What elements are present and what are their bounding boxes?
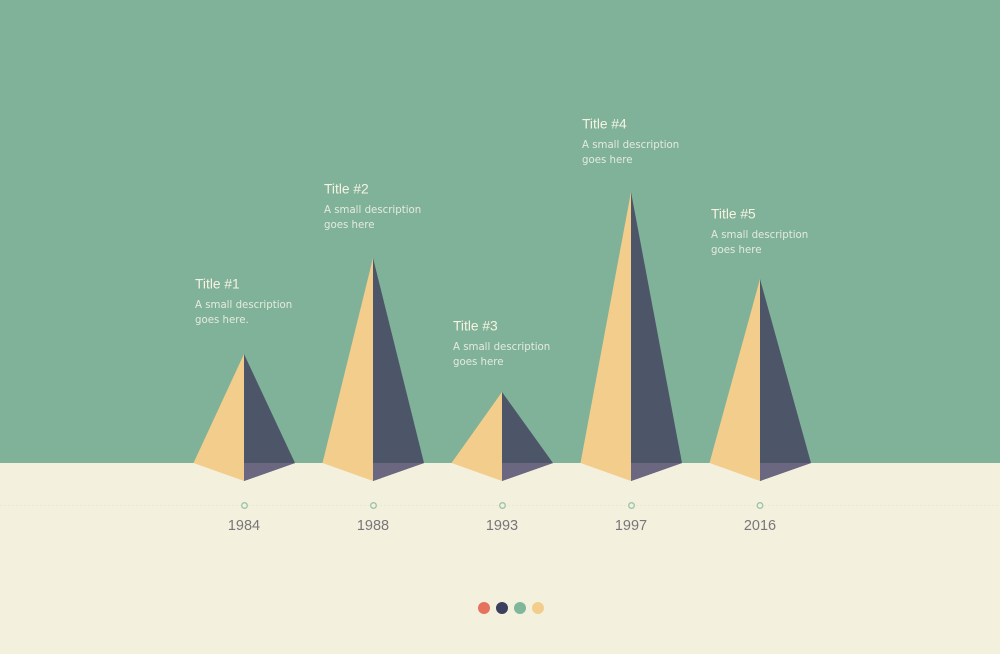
pyramid 1 xyxy=(194,354,295,481)
text block: title 3 xyxy=(453,318,550,368)
timeline marker 2 xyxy=(371,503,376,508)
year label 1984: 1984 xyxy=(228,518,260,534)
pyramid 5 xyxy=(710,279,811,481)
colour palette dots xyxy=(478,602,544,614)
text block: title 2: A small description xyxy=(324,205,421,216)
year label 1993: 1993 xyxy=(486,518,518,534)
text block: title 5: A small description xyxy=(711,230,808,241)
text block: title 3: goes here xyxy=(453,357,503,368)
pyramid 3 xyxy=(452,392,553,481)
text block: title 4: Title #4 xyxy=(582,116,627,132)
text block: title 1: goes here. xyxy=(195,315,249,326)
text block: title 2: goes here xyxy=(324,220,374,231)
text block: title 1: Title #1 xyxy=(195,276,240,292)
year label 2016: 2016 xyxy=(744,518,776,534)
text block: title 3: Title #3 xyxy=(453,318,498,334)
timeline marker 3 xyxy=(500,503,505,508)
pyramid 2 xyxy=(322,258,424,481)
timeline marker 4 xyxy=(629,503,634,508)
text block: title 4 xyxy=(582,116,679,166)
text block: title 4: A small description xyxy=(582,140,679,151)
pyramid 4 xyxy=(580,192,682,481)
panel: green sky background xyxy=(0,0,1000,463)
panel: cream ground xyxy=(0,463,1000,654)
year label 1997: 1997 xyxy=(615,518,647,534)
year label 1988: 1988 xyxy=(357,518,389,534)
text block: title 1: A small description xyxy=(195,300,292,311)
timeline marker 1 xyxy=(242,503,247,508)
text block: title 5 xyxy=(711,206,808,256)
text block: title 5: Title #5 xyxy=(711,206,756,222)
text block: title 3: A small description xyxy=(453,342,550,353)
text block: title 2 xyxy=(324,182,421,231)
text block: title 2: Title #2 xyxy=(324,182,369,196)
text block: title 1 xyxy=(195,276,292,326)
text block: title 5: goes here xyxy=(711,245,761,256)
timeline marker 5 xyxy=(757,503,763,508)
text block: title 4: goes here xyxy=(582,155,632,166)
